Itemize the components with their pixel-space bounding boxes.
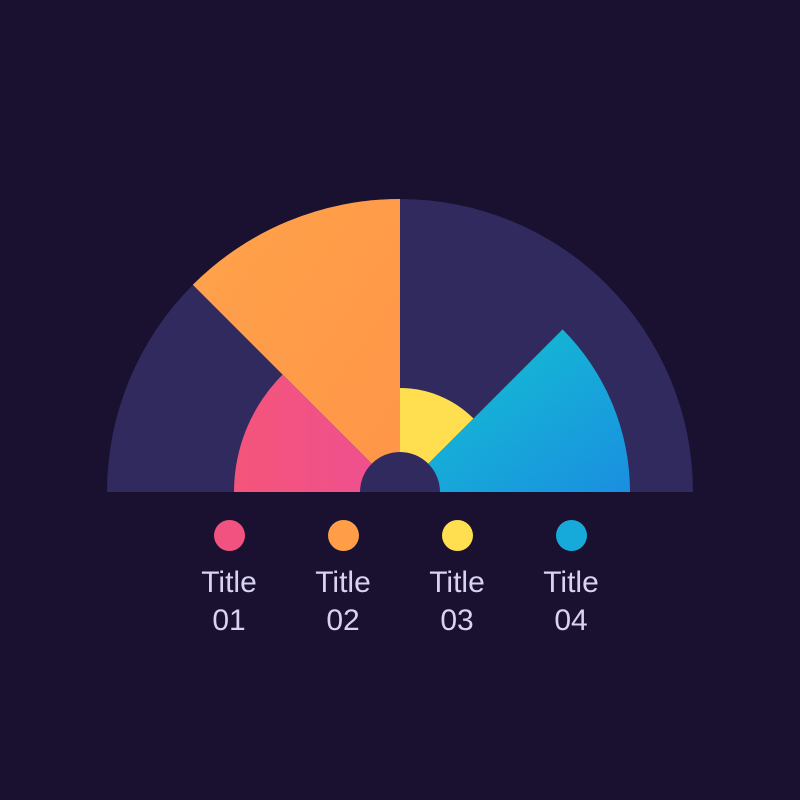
- base semicircle: [107, 199, 693, 492]
- legend: title 03: 03: [440, 604, 474, 637]
- legend: title 02: [315, 520, 371, 637]
- legend: title 04: 04: [554, 604, 588, 637]
- legend: title 01: 01: [212, 604, 246, 637]
- sector: orange: [193, 199, 400, 492]
- legend: title 01: Title: [201, 566, 257, 599]
- legend: title 03: Title: [429, 566, 485, 599]
- legend: title 02: Title: [315, 566, 371, 599]
- center hub: [360, 452, 440, 492]
- legend: title 04: Title: [543, 566, 599, 599]
- sector: yellow: [400, 388, 474, 492]
- sector: cyan: [400, 329, 630, 492]
- legend: title 02: 02: [326, 604, 360, 637]
- sector: pink: [234, 375, 400, 492]
- legend: title 01: [201, 520, 257, 637]
- legend: title 03: [429, 520, 485, 637]
- legend: title 04: [543, 520, 599, 637]
